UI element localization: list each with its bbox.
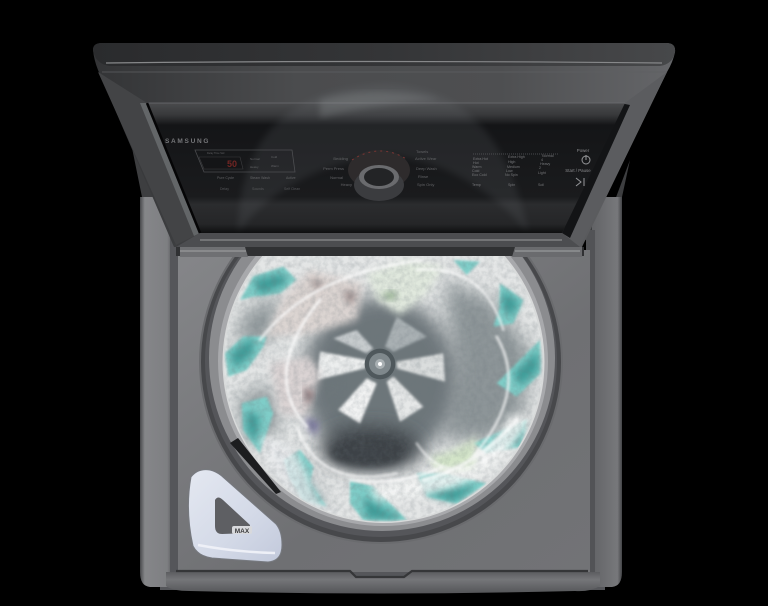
control panel: cycle dial: Towels	[416, 149, 428, 154]
control panel: options: Medium	[507, 165, 520, 169]
lid frame	[93, 43, 675, 247]
control panel: options: Warm	[472, 165, 481, 169]
right strut	[562, 72, 667, 247]
control panel: options: Hot	[473, 161, 479, 165]
grain texture	[224, 256, 542, 522]
left strut	[98, 72, 200, 245]
control panel: cycle dial: Deep Wash	[416, 166, 437, 171]
open lid	[93, 43, 675, 257]
lid glass	[147, 103, 625, 233]
control panel: options: Normal	[542, 154, 554, 158]
control panel: options: High	[508, 160, 515, 164]
control panel: options: 4	[541, 158, 543, 162]
control panel: display: Steam Wash	[250, 176, 270, 180]
control panel: cycle dial: Active Wear	[415, 156, 437, 161]
control panel: display: Sounds	[252, 187, 264, 191]
control panel: power and start	[565, 148, 591, 186]
control panel: options: Heavy	[540, 162, 550, 166]
control panel: cycle dial: Heavy	[341, 182, 352, 187]
hub	[365, 349, 395, 379]
control panel: display: Delay	[220, 187, 229, 191]
control panel: cycle dial: Rinse	[418, 174, 429, 179]
control panel: display: Heavy	[250, 165, 259, 169]
control panel: options: Soil	[538, 183, 544, 187]
clothes: pale green bundle	[371, 266, 428, 318]
pale floor plates	[317, 317, 445, 423]
control panel: display: 50	[227, 159, 237, 169]
bottom frame bar	[176, 233, 580, 247]
control panel: power and start: Power	[577, 148, 590, 153]
front lip	[166, 571, 600, 594]
detergent dispenser	[188, 470, 282, 562]
control panel: options: Temp	[472, 183, 481, 187]
control panel: options: Spin	[508, 183, 515, 187]
clothes: pale top-left bundle	[267, 270, 363, 337]
control panel: cycle dial: Perm Press	[323, 166, 344, 171]
control panel: options	[472, 154, 558, 187]
control panel: cycle dial: Bedding	[333, 156, 348, 161]
control panel: cycle dial: Spin Only	[417, 182, 434, 187]
control panel: display: Cold	[271, 155, 278, 159]
tub opening rings	[199, 256, 561, 542]
control panel: display	[195, 150, 300, 191]
control panel: options: Low	[506, 169, 513, 173]
control panel: brand: SAMSUNG	[165, 138, 210, 145]
white swirl strokes	[260, 260, 517, 482]
clothes: lower-left bundle	[270, 357, 320, 417]
control panel: display: Delay Time Soil	[207, 152, 225, 155]
control panel: power and start: Start / Pause	[565, 168, 591, 173]
speckled grey outer zone	[237, 280, 530, 513]
teal laundry patches: light	[225, 260, 540, 520]
control panel: options: 2	[539, 166, 541, 170]
control panel: options: Cold	[472, 169, 479, 173]
reflection of drum in glass	[238, 84, 528, 232]
illustration: top-loading washing machine	[93, 43, 676, 594]
drum with swirling laundry	[224, 256, 542, 522]
control panel: options: No Spin	[505, 173, 518, 177]
rim slot	[230, 438, 281, 494]
washer body	[130, 138, 630, 594]
control panel: display: Active	[286, 176, 296, 180]
control panel: cycle dial	[323, 149, 437, 201]
control panel: display: Pure Cycle	[217, 176, 234, 180]
dark inner ring	[302, 297, 458, 463]
control panel: display: Warm	[271, 164, 279, 168]
control panel: options: Eco Cold	[472, 173, 487, 177]
control panel: options: Extra High	[508, 155, 525, 159]
control panel: options: Extra Hot	[473, 157, 488, 161]
clothes: bottom white streams	[256, 432, 331, 512]
teal laundry patches: dark	[230, 273, 538, 520]
control panel: display: Normal	[250, 157, 260, 161]
control panel: options: Light	[538, 171, 546, 175]
hinge: left	[180, 247, 248, 257]
label: MAX: MAX	[235, 528, 250, 535]
lid top band	[93, 43, 675, 66]
hinge: right	[512, 247, 582, 257]
control panel: display: Self Clean	[284, 187, 300, 191]
control panel: cycle dial: Normal	[330, 175, 343, 180]
